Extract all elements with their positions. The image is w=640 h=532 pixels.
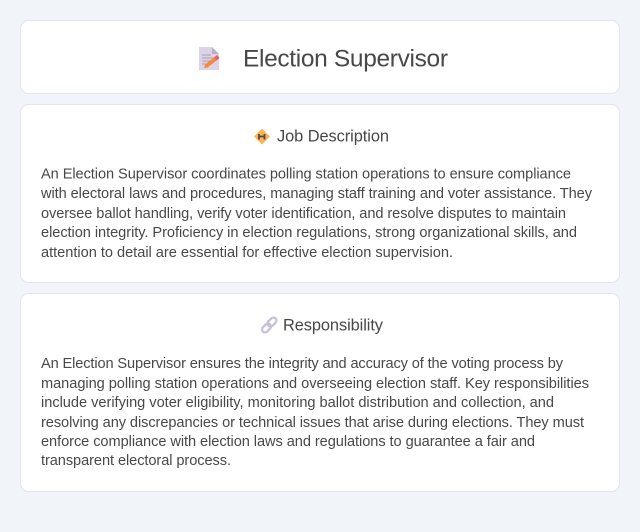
text block: job description: An Election Supervisor coordinates polling station operations to ensure compliance [41, 166, 571, 182]
text block: job description: attention to detail are essential for effective election supervision. [41, 245, 453, 261]
icon: chain link [261, 316, 278, 334]
panel: responsibility [20, 294, 620, 492]
text block: responsibility: include verifying voter eligibility, monitoring ballot distribution and collection, and [41, 395, 554, 411]
icon: document with pencil [199, 47, 220, 70]
text block: job description: election integrity. Proficiency in election regulations, strong organizational skills, and [41, 225, 577, 241]
text block: responsibility: resolving any discrepancies or technical issues that arise during elections. They must [41, 415, 584, 431]
panel: job description [20, 104, 620, 282]
text block: responsibility [41, 356, 589, 469]
heading: responsibility: Responsibility [283, 316, 384, 334]
text block: job description [40, 166, 593, 261]
text block: job description: with electoral laws and procedures, managing staff training and voter assistance. They [40, 186, 593, 202]
text block: responsibility: enforce compliance with election laws and regulations to guarantee a fair and [41, 434, 535, 450]
title: Election Supervisor [243, 46, 448, 72]
text block: responsibility: An Election Supervisor ensures the integrity and accuracy of the voting process by [41, 356, 564, 372]
text block: responsibility: transparent electoral process. [41, 453, 231, 469]
heading: job description: Job Description [277, 128, 389, 146]
text block: job description: oversee ballot handling, verify voter identification, and resolve disputes to maintain [41, 206, 566, 222]
panel: title card [20, 20, 620, 94]
text block: responsibility: managing polling station operations and overseeing election staff. Key responsibilities [41, 376, 589, 392]
icon: diamond road sign [254, 128, 270, 144]
